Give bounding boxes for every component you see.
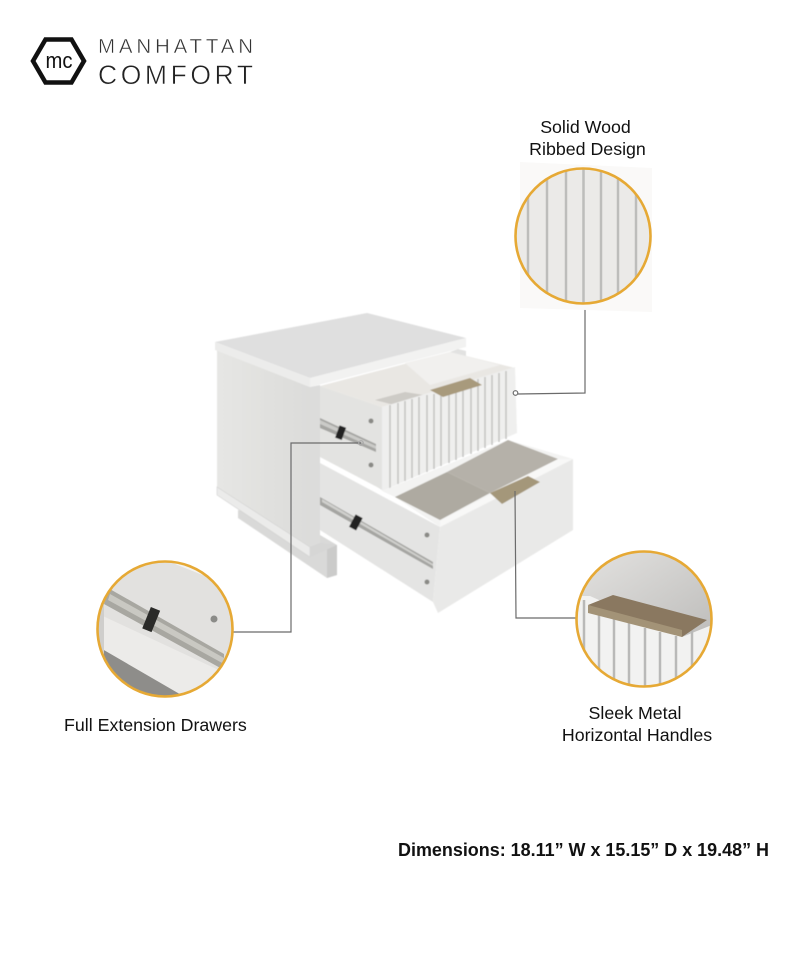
dimensions: Dimensions: 18.11” W x 15.15” D x 19.48” H [398, 840, 769, 860]
label: full extension drawers: Full Extension Drawers [64, 715, 247, 735]
lower handle [490, 476, 540, 504]
callout: full extension drawers [64, 555, 247, 735]
brand logo [33, 35, 253, 90]
lower drawer interior [382, 440, 573, 527]
label: handles: Horizontal Handles [562, 725, 712, 745]
full extension slide, lower [320, 497, 433, 584]
leader: ribbed design [513, 304, 585, 395]
cabinet base [238, 510, 337, 578]
callout leader lines [232, 304, 585, 632]
lower drawer side [320, 463, 440, 602]
heading: ribbed design: Solid Wood [540, 117, 631, 137]
upper drawer interior [320, 352, 515, 407]
upper drawer [320, 349, 517, 491]
cabinet plinth [217, 487, 310, 557]
brand name [98, 35, 253, 90]
cabinet front edge [310, 385, 320, 547]
backdrop: ribbed swatch [520, 162, 652, 312]
full extension slide, upper [320, 418, 376, 468]
cabinet top [215, 313, 466, 387]
label: handles: Sleek Metal [589, 703, 681, 723]
lower drawer [320, 440, 573, 613]
detail circle: metal handle [575, 550, 715, 690]
callout: sleek metal handles [562, 550, 715, 745]
cabinet side panel [217, 350, 310, 547]
leader: drawers [232, 441, 363, 632]
heading: ribbed design: Ribbed Design [529, 139, 646, 159]
callout: solid wood ribbed design [516, 117, 652, 312]
icon: hexagon monogram [33, 40, 84, 82]
brand name: MANHATTAN [98, 35, 253, 58]
icon: hexagon monogram: mc [46, 48, 72, 73]
upper handle [430, 378, 482, 397]
detail circle: ribbed wood [516, 165, 650, 305]
ribbed drawer front [382, 367, 517, 491]
leader: handles [515, 491, 576, 618]
upper drawer side [320, 386, 382, 490]
lower drawer front [433, 459, 573, 613]
brand name: COMFORT [98, 60, 253, 90]
nightstand product illustration [215, 313, 573, 613]
detail circle: drawer slide [96, 560, 234, 698]
